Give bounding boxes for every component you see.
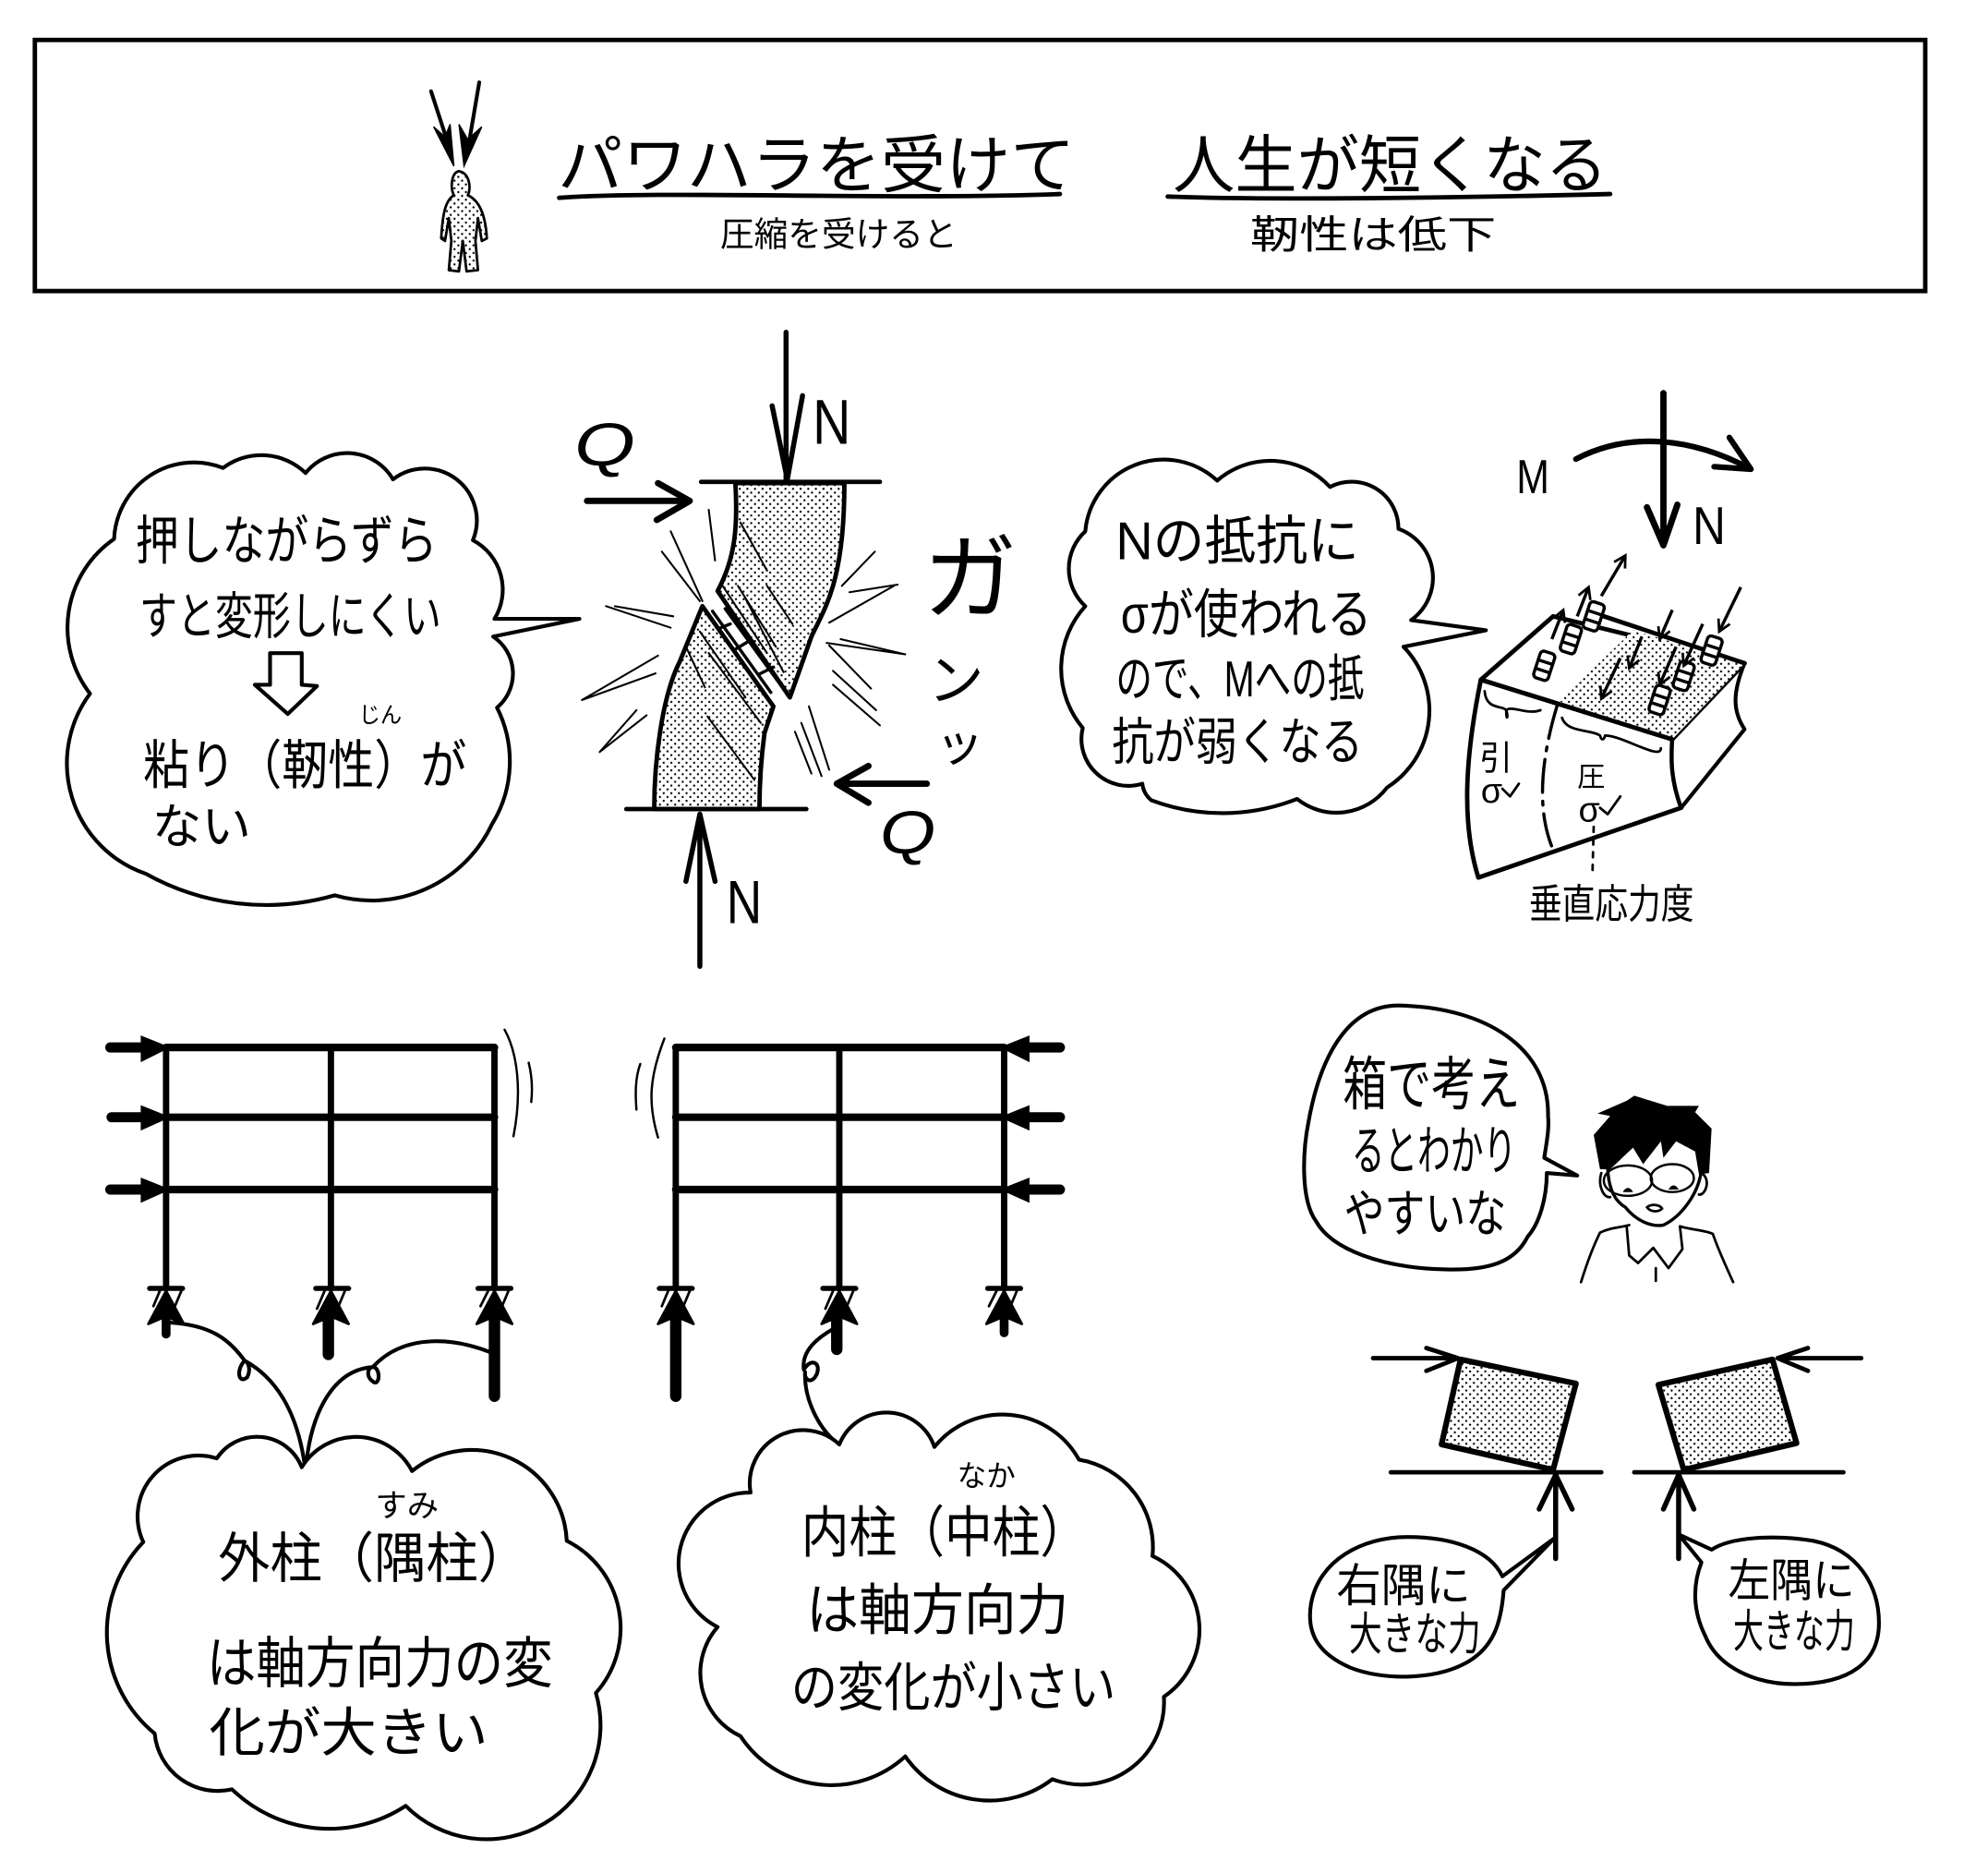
subheading: toughness: 靭性は低下 [1250,213,1496,258]
ground line [1391,1470,1601,1474]
3D column section diagram: σ [1578,791,1600,830]
bubble text: 左隅に [1729,1556,1855,1607]
frame members [166,1047,495,1190]
supports and reactions [658,1288,1022,1396]
label: N top: N [813,387,850,458]
top plate [701,480,880,484]
rebars [1533,600,1723,716]
bubble text: 外柱（隅柱） [218,1529,530,1589]
label: N bottom: N [727,868,762,937]
lateral load arrows [1020,1047,1060,1190]
arrow: Q from left [587,483,690,520]
label: M: M [1516,451,1549,504]
bubble text: Nの抵抗に [1115,513,1359,572]
glasses [1604,1164,1693,1196]
ruby: sumi: すみ [375,1489,439,1524]
stippled box [1441,1359,1576,1469]
subheading: compression: 圧縮を受けると [720,214,958,253]
mouth [1647,1205,1662,1211]
rotated box left [1373,1348,1601,1559]
arrow: top force [1777,1348,1861,1371]
3D column section diagram: σ [1481,771,1502,811]
face outline [1608,1164,1702,1226]
speech bubble: thinking with a box [1304,1006,1577,1270]
block front and side faces [1467,680,1681,877]
speech bubble: outer columns [107,1437,620,1839]
speech bubble: N resistance [1061,460,1486,813]
crack hatching inside the column [687,523,792,779]
speech bubble: pushing while shearing: すと変形しにくい [139,588,441,646]
block top face [1481,616,1744,740]
stippled box [1658,1359,1797,1469]
neutral axis [1543,707,1557,850]
character: man with glasses [1581,1095,1733,1282]
ruby: naka: なか [958,1459,1016,1492]
speech bubble: N resistance: σが使われる [1121,586,1372,645]
bubble text: 右隅に [1336,1561,1471,1612]
label: Q bottom: Q [880,798,935,866]
speech bubble: outer columns: 化が大きい [210,1704,488,1763]
heading: life shortened: 人生が短くなる [1173,130,1608,201]
bubble text: 内柱（中柱） [801,1502,1088,1565]
arrow: N from above [772,332,802,479]
icon: person being compressed by arrows [431,82,487,272]
speech bubble: outer columns: は軸方向力の変 [207,1632,553,1695]
label: compressive stress: 圧 [1577,762,1605,792]
exposed rebar in crack [713,609,786,693]
rebar stress arrows [1552,555,1741,699]
speech bubble: thinking with a box: やすいな [1343,1185,1506,1242]
arrow: axial N [1647,393,1678,545]
underline right [1168,194,1610,199]
label: vertical stress: 垂直応力度 [1529,882,1693,927]
ears [1600,1173,1706,1197]
arrow: reaction [1663,1475,1693,1559]
hair [1594,1095,1712,1174]
heading: pressure: パワハラを受けて [558,130,1075,201]
rotated box right [1634,1348,1861,1559]
arrow: N from below [686,815,715,966]
speech bubble: N resistance: ので、Mへの抵 [1115,650,1364,707]
left frame under lateral load [110,1030,532,1396]
compressed zone stipple [1560,630,1744,740]
speech bubble: right corner [1310,1537,1554,1676]
lateral load arrows [110,1047,150,1190]
3D column section diagram [1467,393,1751,927]
arrow: moment M [1576,438,1751,469]
supports and reactions [149,1288,512,1396]
speech bubble: inner columns: の変化が小さい [791,1659,1115,1718]
brace: compression [1562,718,1661,752]
sound effect: gan: ッ [935,719,983,772]
ground line [1634,1470,1843,1474]
sound effect: gan [923,526,1017,772]
speech bubble: pushing while shearing: 粘り（靭性）が [143,737,466,796]
arrow: reaction [1539,1475,1572,1559]
bubble text: 箱で考え [1343,1053,1520,1118]
speech bubble: inner columns: は軸方向力 [806,1578,1069,1641]
failed column diagram [574,332,1017,966]
banner frame [35,40,1925,291]
speech bubble: inner columns [679,1412,1199,1801]
brace: tension [1485,691,1540,718]
label: tension stress: 引 [1479,738,1512,777]
label: Q top: Q [574,410,635,478]
label: N: N [1693,497,1726,556]
bubble text: 押しながらずら [136,513,438,572]
speech bubble: pushing while shearing: ない [152,801,251,854]
eyes [1623,1186,1679,1192]
frame members [676,1047,1004,1190]
speech bubble: thinking with a box: るとわかり [1352,1122,1516,1181]
speech bubble: left corner: 大きな力 [1733,1607,1855,1658]
arrow: top force [1373,1348,1458,1371]
hollow down arrow [255,653,317,714]
sound effect: gan: ン [928,649,984,712]
speech bubble: N resistance: 抗が弱くなる [1112,713,1363,770]
sound effect: gan: ガ [923,526,1017,632]
sway marks [636,1039,664,1138]
shirt [1581,1225,1733,1282]
speech bubble: pushing while shearing: じん [359,704,402,729]
bottom plate [626,807,806,811]
leader: dotted line to label [1593,827,1594,875]
underline left [560,194,1060,198]
speech bubble: left corner [1679,1534,1879,1684]
upper column block [717,483,844,697]
impact spikes [582,510,905,776]
right frame under lateral load [636,1037,1060,1396]
arrow: Q from right [837,766,927,803]
lower column block [655,606,774,809]
title banner [35,40,1925,291]
speech bubble: pushing while shearing [66,453,580,905]
sway marks [504,1030,532,1136]
speech bubble: right corner: 大きな力 [1349,1609,1481,1660]
connectors with loops to bubbles [171,1323,839,1471]
